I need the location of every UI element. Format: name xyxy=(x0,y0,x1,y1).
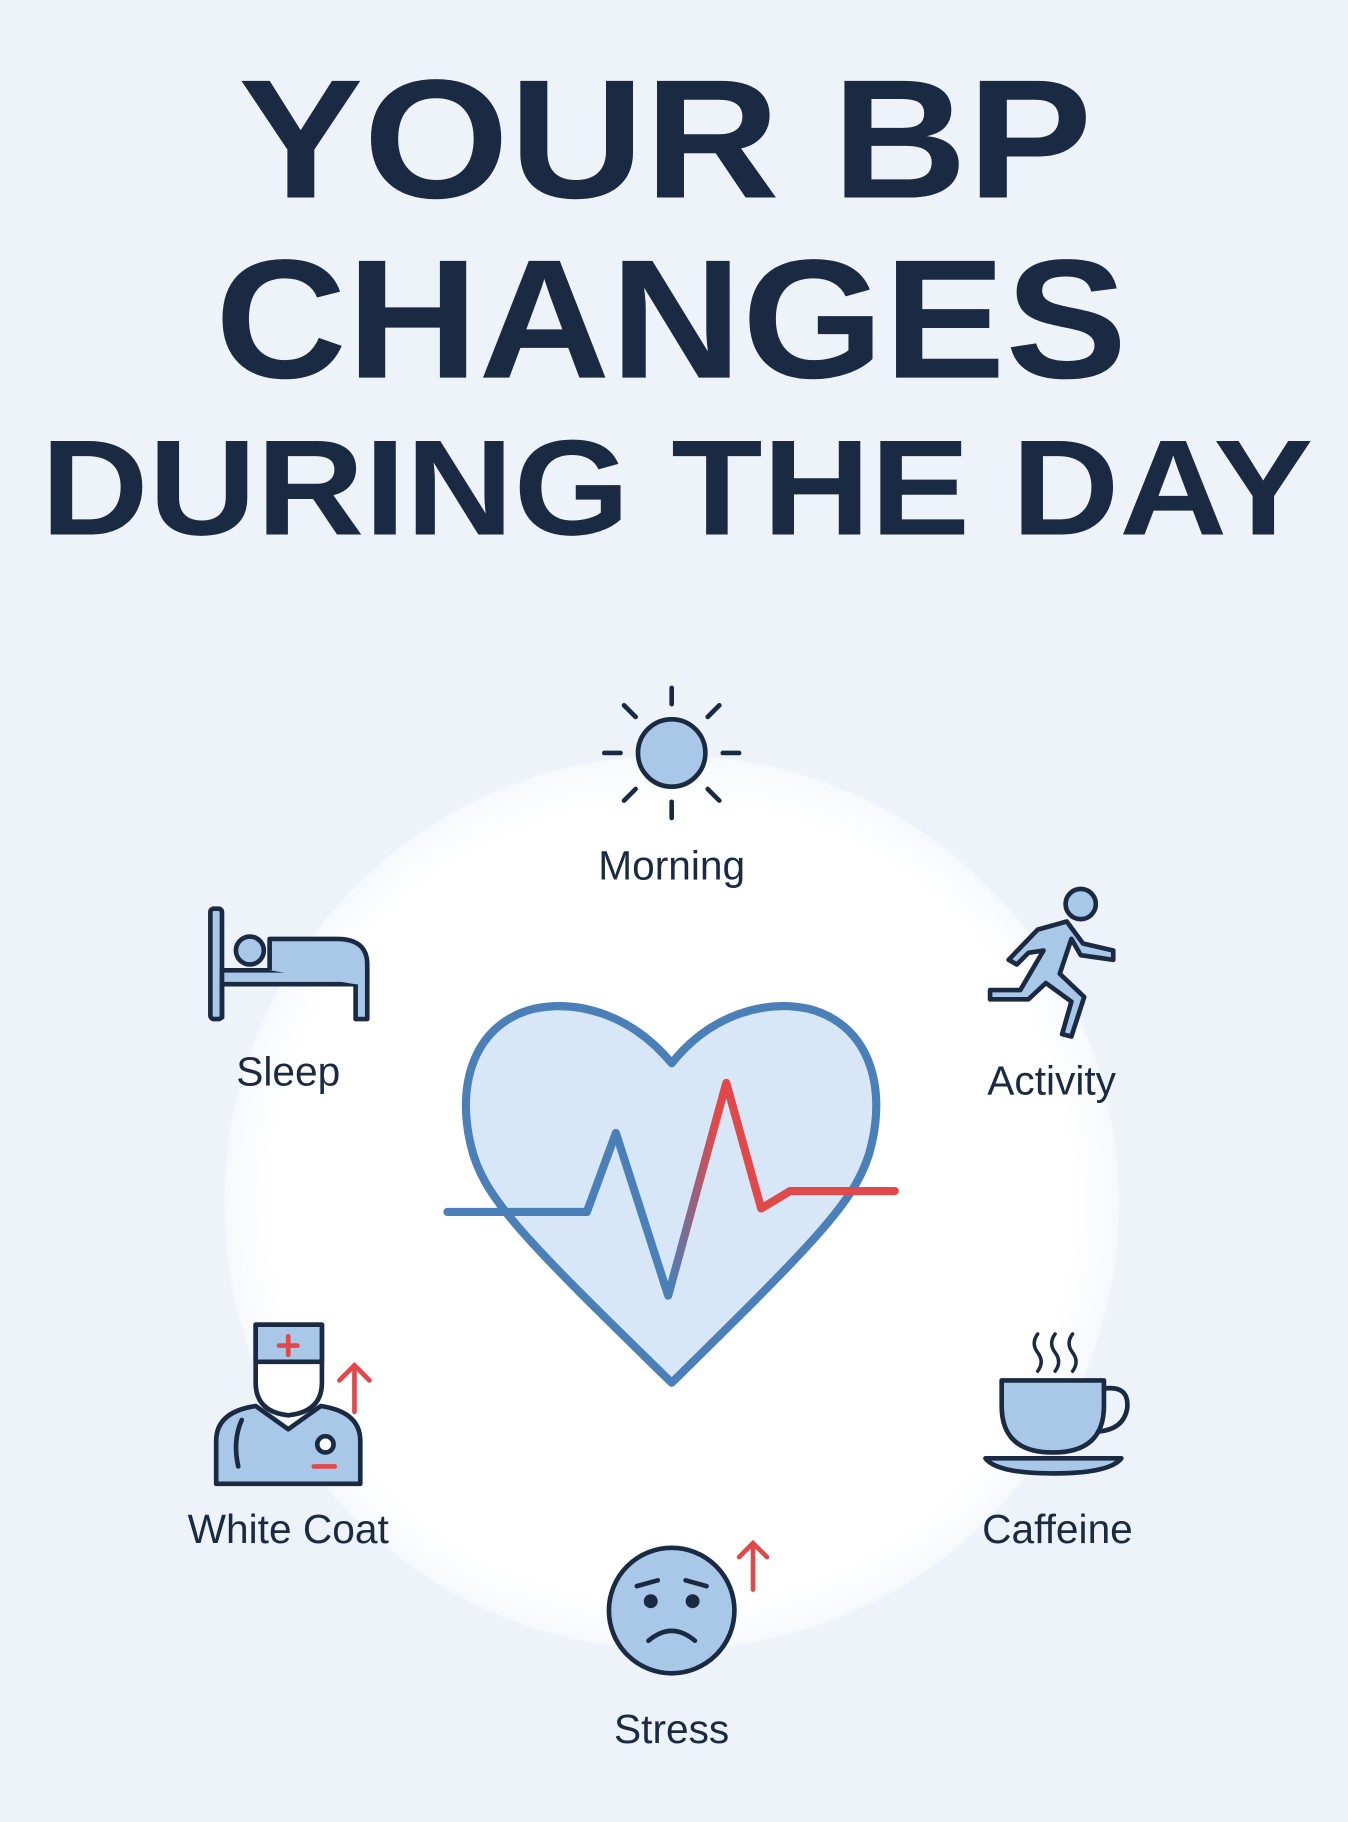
title: CHANGES xyxy=(215,224,1127,414)
icon: runner xyxy=(990,889,1113,1036)
label: Morning: Morning xyxy=(598,843,745,889)
title xyxy=(41,44,1313,564)
label: Caffeine: Caffeine xyxy=(982,1506,1133,1552)
arrow: stress up xyxy=(739,1543,767,1590)
title: YOUR BP xyxy=(238,44,1092,234)
arrow: white coat up xyxy=(339,1365,370,1412)
label: White Coat: White Coat xyxy=(188,1506,389,1552)
icon: stressed face xyxy=(609,1548,734,1673)
icon: doctor xyxy=(216,1325,360,1484)
icon: bed xyxy=(210,909,367,1019)
label: Activity: Activity xyxy=(987,1058,1117,1104)
label: Stress: Stress xyxy=(614,1706,729,1752)
heart with ECG xyxy=(447,1006,895,1383)
title: DURING THE DAY xyxy=(41,412,1313,564)
label: Sleep: Sleep xyxy=(236,1048,340,1094)
icon: sun xyxy=(604,688,739,818)
white circle background xyxy=(224,755,1119,1650)
icon: coffee cup xyxy=(985,1334,1127,1473)
